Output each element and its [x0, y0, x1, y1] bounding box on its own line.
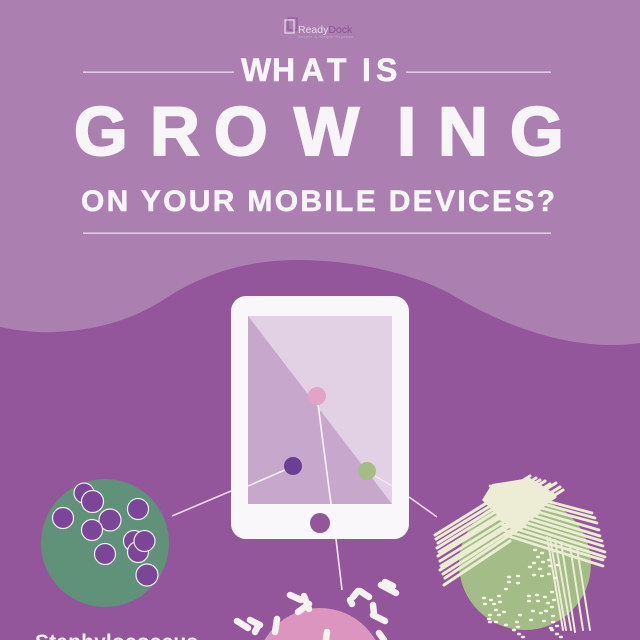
- logo: ReadyDock: ReadyDock: [298, 24, 353, 36]
- screen line to pink dot: [318, 404, 331, 504]
- streak overlap patch: [482, 478, 557, 533]
- bacteria: pink rods: [237, 582, 396, 640]
- cocci cells: [52, 483, 158, 586]
- connector: pink bacteria: [336, 539, 342, 590]
- tablet device: [231, 296, 409, 539]
- pink petri circle: [256, 608, 384, 640]
- colony dots: [483, 550, 562, 637]
- streak bundle: vertical lines: [547, 537, 590, 632]
- title: ON YOUR MOBILE DEVICES?: ON YOUR MOBILE DEVICES?: [81, 185, 555, 218]
- screen line to green dot: [375, 476, 392, 486]
- connector: green bacteria: [409, 497, 437, 517]
- green dot: [358, 462, 376, 480]
- purple dot: [284, 457, 302, 475]
- rod cells: [237, 582, 396, 640]
- rule under title: [83, 232, 551, 234]
- rule left of WHAT IS: [83, 72, 234, 73]
- streak bundle: falling lines: [490, 486, 605, 566]
- streak bundle: rising lines: [435, 476, 563, 585]
- screen line to purple dot: [248, 470, 285, 486]
- logo: ReadyDock: [285, 18, 353, 39]
- connector: staphylococcus: [172, 491, 231, 516]
- screen highlight: [248, 316, 392, 504]
- bacteria: green streaked: [435, 476, 605, 637]
- tablet body: [231, 296, 409, 539]
- rule right of WHAT IS: [406, 72, 551, 73]
- title: GROWING: GROWING: [74, 93, 564, 170]
- tablet screen: [248, 316, 392, 504]
- green petri circle: [459, 498, 591, 630]
- pink dot: [308, 387, 326, 405]
- logo: ReadyDock: Secure & Simple Expense: [298, 35, 353, 39]
- title: WHAT IS: WHATIS: [241, 52, 397, 88]
- bacteria: staphylococcus: [41, 479, 169, 607]
- tablet home button: [310, 513, 330, 533]
- background: light purple wave header: [0, 0, 640, 345]
- green petri circle: [41, 479, 169, 607]
